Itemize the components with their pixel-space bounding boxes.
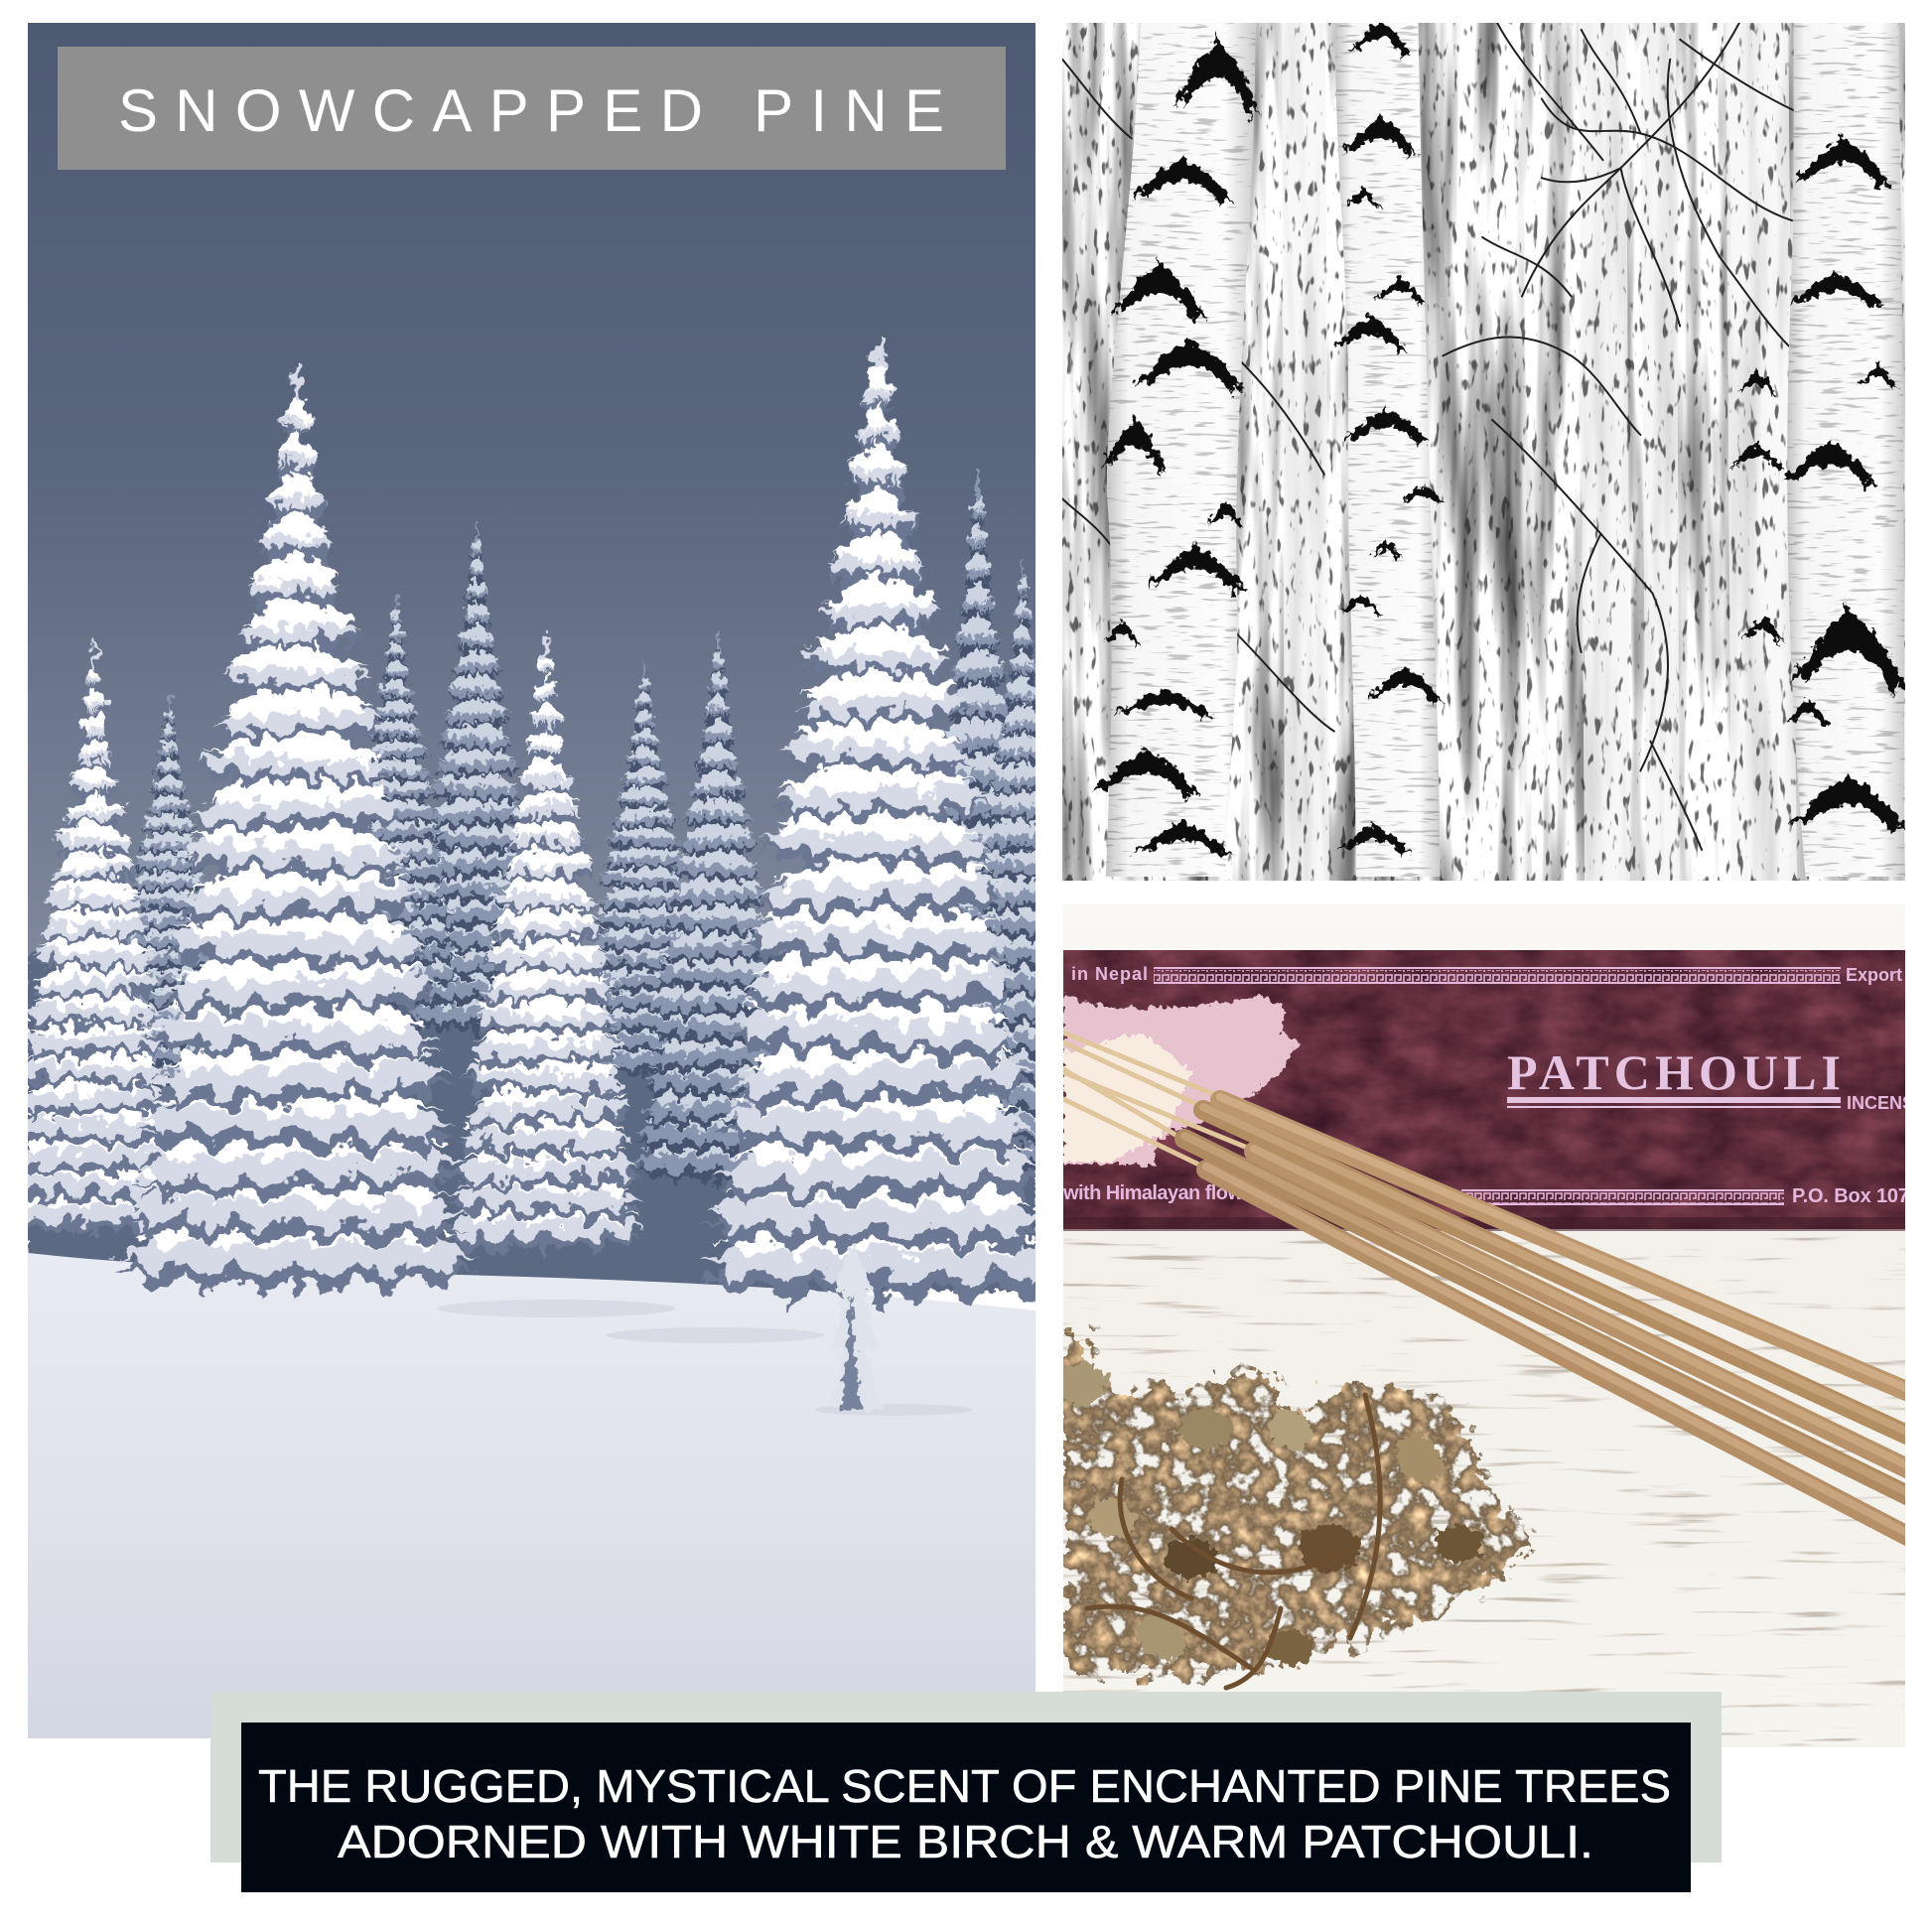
incense sticks <box>1184 1097 1911 1538</box>
panel: snowy pine forest photo <box>0 23 1093 1738</box>
distant thin birch trunks <box>1282 23 1797 881</box>
sage backing rectangle <box>210 1692 1722 1863</box>
foreground snow-laden spruce trees <box>0 335 1061 1308</box>
double rule under product name <box>1507 1097 1841 1108</box>
fine bark lenticels on trunks <box>1062 23 1905 881</box>
wood grain <box>1063 1231 1905 1747</box>
small snowy sapling <box>832 1241 882 1410</box>
snowy ground <box>28 1253 1035 1738</box>
background spruce trees <box>28 471 1093 1291</box>
caption line 1: THE RUGGED, MYSTICAL SCENT OF ENCHANTED PINE TREES <box>258 1760 1671 1812</box>
box shadow edge <box>1063 1217 1905 1231</box>
top label: Export: Export <box>1846 965 1902 985</box>
pale forest background <box>1062 23 1905 881</box>
panel: tagline callout <box>210 1692 1722 1892</box>
top decorative band <box>1154 967 1841 984</box>
bottom label: P.O. Box: P.O. Box 107 <box>1792 1185 1909 1207</box>
dusk sky <box>28 23 1035 1016</box>
panel: white birch photo <box>1057 17 1908 881</box>
top label: in Nepal: in Nepal <box>1071 964 1148 984</box>
pink flower petal <box>1063 995 1300 1165</box>
caption line 2: ADORNED WITH WHITE BIRCH & WARM PATCHOULI. <box>338 1816 1593 1867</box>
bottom decorative band <box>1461 1189 1784 1205</box>
white wood surface <box>1063 904 1905 1747</box>
panel: title banner <box>58 47 1006 170</box>
title text: SNOWCAPPED PINE <box>118 77 944 144</box>
panel: patchouli incense photo <box>1056 904 1926 1747</box>
soft ground shadows <box>437 1300 973 1416</box>
bare branches <box>1057 23 1838 850</box>
purple incense box <box>1062 950 1926 1231</box>
black birch bark marks <box>1092 17 1908 860</box>
banner box <box>58 47 1006 170</box>
label: INCENSE: INCENSE <box>1847 1093 1926 1113</box>
bottom label: with Himalayan flowers: with Himalayan flow <box>1062 1182 1243 1204</box>
dried patchouli leaves <box>1056 1330 1531 1688</box>
PATCHOULI product name: PATCHOULI <box>1507 1044 1841 1100</box>
main birch trunks <box>1106 23 1904 877</box>
distant bark specks <box>1062 23 1905 881</box>
incense stems <box>1063 1033 1257 1170</box>
black caption box <box>241 1723 1691 1892</box>
